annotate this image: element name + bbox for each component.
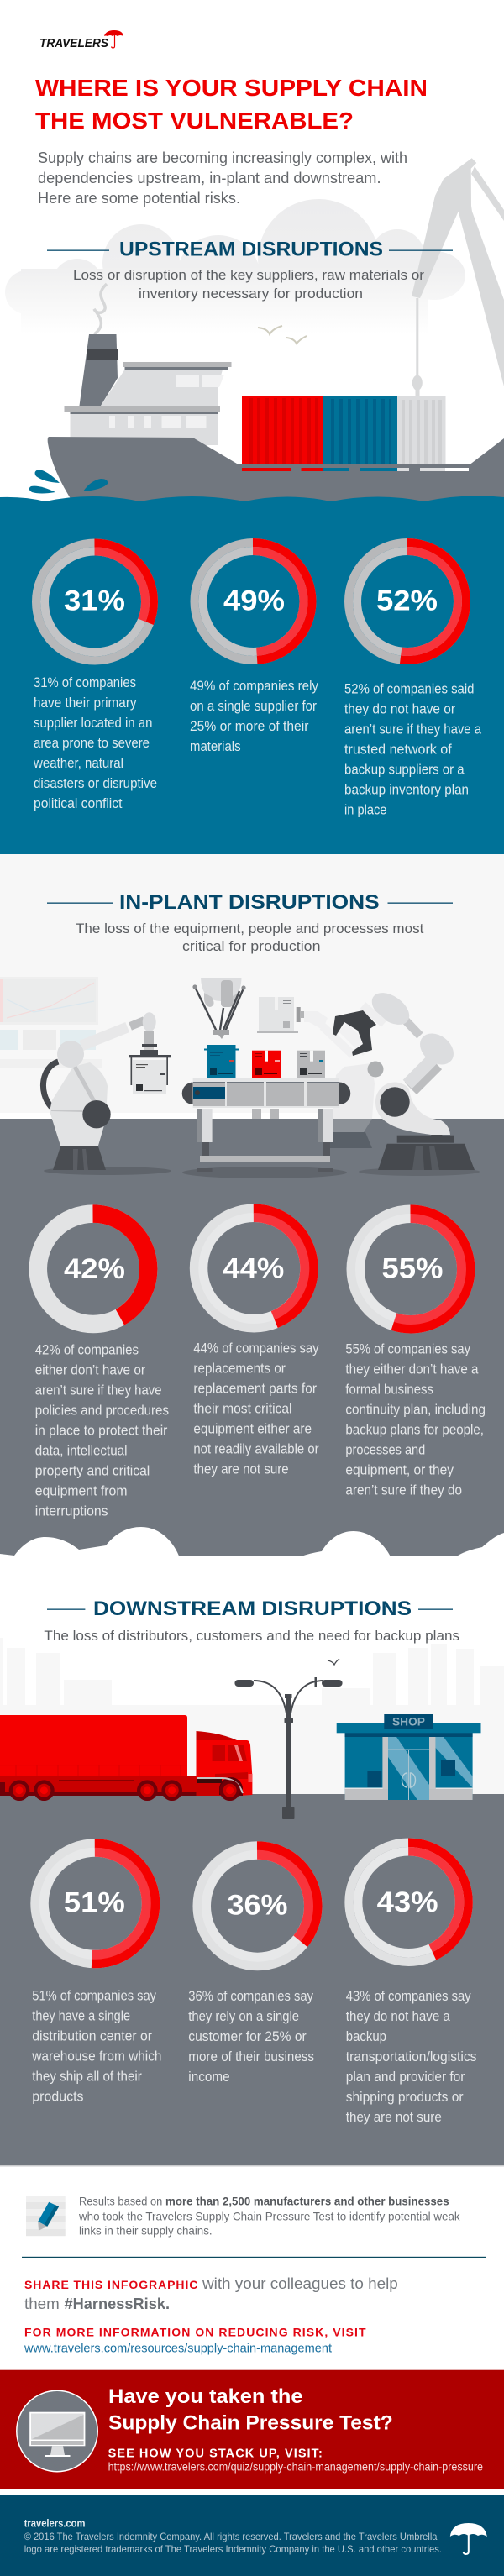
text: 52% stat: backup inventory plan: [344, 783, 469, 798]
text: more information link: www.travelers.com/resources/supply-chain-management: [24, 2342, 333, 2356]
crane silhouette: [412, 158, 504, 396]
delta robot: [192, 978, 246, 1039]
text: 36% stat: customer for 25% or: [188, 2029, 307, 2044]
icon: pencil on notepad: [26, 2196, 66, 2236]
intro text: [38, 150, 407, 207]
text: share call to action: them: [24, 2295, 60, 2312]
donut chart: 55%: [351, 1209, 470, 1329]
donut chart: 49%: 49%: [223, 585, 285, 616]
boxes on conveyor: [204, 1045, 325, 1078]
text: 42% stat: in place to protect their: [35, 1424, 168, 1439]
text: 36% stat: more of their business: [188, 2049, 314, 2064]
water drops: [29, 470, 108, 494]
subheading: upstream: Loss or disruption of the key suppliers, raw materials or: [73, 268, 425, 283]
text: 51% stat: 51% of companies say: [32, 1989, 157, 2004]
text: 42% stat: data, intellectual: [35, 1444, 128, 1459]
text: legal: logo are registered trademarks of The Travelers Indemnity Company in the U.S. and other countries.: [24, 2543, 442, 2555]
text: 55% stat: processes and: [345, 1443, 425, 1458]
text: 31% stat: weather, natural: [33, 756, 123, 771]
text: 44% stat: replacement parts for: [193, 1382, 317, 1397]
donut chart: 42%: [38, 1214, 149, 1324]
text: 52% stat: they do not have or: [344, 702, 455, 717]
text: 43% stat: transportation/logistics: [346, 2049, 477, 2064]
bird: [328, 1659, 339, 1665]
text: more information link: FOR MORE INFORMATION ON REDUCING RISK, VISIT: [24, 2326, 366, 2339]
donut chart: 44%: [194, 1209, 313, 1328]
text: survey note: who took the Travelers Supply Chain Pressure Test to identify potential weak: [78, 2209, 461, 2222]
smoke: [94, 284, 107, 334]
subheading: in-plant: The loss of the equipment, people and processes most: [76, 921, 424, 936]
intro text: Here are some potential risks.: [38, 190, 240, 207]
text: 42% stat: equipment from: [35, 1484, 128, 1499]
text: 43% stat: 43% of companies say: [346, 1989, 471, 2004]
conveyor: [182, 1078, 350, 1178]
faded background robot: [330, 1027, 383, 1148]
subheading: upstream: inventory necessary for production: [139, 286, 363, 302]
subheading: upstream: [73, 268, 425, 302]
text: 43% stat: plan and provider for: [346, 2070, 465, 2085]
text: 52% stat: aren’t sure if they have a: [344, 722, 482, 737]
donut chart: 49%: [195, 543, 312, 660]
text: 44% stat: their most critical: [193, 1402, 292, 1417]
donut chart: 51%: [35, 1844, 155, 1964]
panel: footer: [0, 2495, 504, 2576]
text: 51% stat: distribution center or: [32, 2029, 152, 2044]
text: 51% stat: [31, 1989, 162, 2105]
donut chart: 31%: 31%: [64, 585, 125, 616]
heading: upstream: UPSTREAM DISRUPTIONS: [119, 239, 383, 260]
text: 49% stat: materials: [190, 739, 241, 754]
text: 31% stat: have their primary: [34, 695, 137, 711]
donut chart: 36%: [197, 1846, 318, 1966]
text: banner headline: Supply Chain Pressure Test?: [108, 2412, 393, 2435]
text: 52% stat: backup suppliers or a: [344, 763, 465, 778]
donut chart: 42%: 42%: [64, 1253, 125, 1285]
heading: in-plant: IN-PLANT DISRUPTIONS: [119, 891, 380, 914]
donut chart: 44%: 44%: [223, 1253, 284, 1285]
text: 52% stat: [344, 682, 482, 818]
text: legal: travelers.com: [24, 2516, 85, 2529]
text: 43% stat: backup: [346, 2029, 386, 2044]
donut chart: 36%: 36%: [227, 1889, 287, 1921]
text: 44% stat: not readily available or: [193, 1442, 319, 1457]
text: 52% stat: 52% of companies said: [344, 682, 474, 697]
text: banner headline: Have you taken the: [108, 2385, 302, 2408]
text: survey note: Results based on: [79, 2195, 162, 2208]
text: 42% stat: 42% of companies: [35, 1343, 139, 1358]
floor: [0, 1794, 504, 2165]
panel: in-plant disruptions: [0, 854, 504, 1556]
text: 44% stat: they are not sure: [193, 1462, 289, 1477]
text: share call to action: SHARE THIS INFOGRAPHIC: [24, 2278, 197, 2291]
text: 31% stat: disasters or disruptive: [34, 776, 157, 791]
shop: [337, 1714, 480, 1800]
containers: [242, 396, 445, 464]
text: 31% stat: 31% of companies: [34, 675, 136, 690]
text: survey note: links in their supply chains.: [79, 2224, 213, 2238]
text: survey note: [78, 2195, 461, 2238]
donut chart: 55%: 55%: [381, 1253, 444, 1285]
icon: monitor: [17, 2390, 97, 2472]
text: 43% stat: they are not sure: [346, 2110, 442, 2125]
box in gripper: [257, 997, 353, 1055]
text: 44% stat: replacements or: [193, 1361, 286, 1377]
text: 43% stat: [346, 1989, 477, 2125]
panel: downstream disruptions: [0, 1598, 504, 2167]
donut chart: 51%: 51%: [64, 1887, 125, 1919]
ship: [48, 334, 504, 504]
heading: downstream: DOWNSTREAM DISRUPTIONS: [93, 1598, 412, 1620]
text: 42% stat: aren’t sure if they have: [35, 1383, 162, 1398]
text: banner link: [108, 2447, 483, 2474]
text: 55% stat: formal business: [345, 1382, 433, 1398]
text: 51% stat: products: [32, 2090, 84, 2105]
robot arm: right: [333, 986, 480, 1176]
subheading: in-plant: critical for production: [182, 939, 321, 954]
text: 55% stat: aren’t sure if they do: [345, 1483, 462, 1498]
text: 49% stat: on a single supplier for: [190, 699, 317, 714]
text: share call to action: with your colleagues to help: [202, 2275, 398, 2292]
text: 55% stat: 55% of companies say: [345, 1342, 471, 1357]
text: 36% stat: income: [188, 2070, 230, 2085]
text: 49% stat: 25% or more of their: [190, 719, 309, 734]
text: 44% stat: 44% of companies say: [193, 1341, 319, 1356]
text: 31% stat: political conflict: [34, 796, 123, 811]
panel: pressure test banner: [0, 2370, 504, 2489]
text: banner link: SEE HOW YOU STACK UP, VISIT:: [108, 2447, 323, 2460]
text: 55% stat: they either don’t have a: [345, 1362, 479, 1377]
text: 42% stat: interruptions: [35, 1504, 108, 1519]
shop: SHOP: [392, 1715, 425, 1729]
text: 31% stat: [33, 675, 157, 811]
text: 49% stat: [190, 679, 319, 754]
intro text: Supply chains are becoming increasingly complex, with: [38, 150, 407, 166]
donut chart: 52%: [349, 543, 466, 660]
text: 31% stat: supplier located in an: [34, 716, 152, 731]
truck: [0, 1715, 252, 1801]
water panel: [0, 496, 504, 854]
text: 52% stat: in place: [344, 803, 386, 818]
title: [35, 75, 428, 134]
logo: Travelers: TRAVELERS: [39, 36, 108, 50]
text: 31% stat: area prone to severe: [34, 736, 150, 751]
text: share call to action: [24, 2275, 398, 2312]
text: 36% stat: [188, 1989, 314, 2085]
text: 55% stat: backup plans for people,: [345, 1423, 484, 1438]
text: 49% stat: 49% of companies rely: [190, 679, 319, 694]
text: survey note: more than 2,500 manufacturers and other businesses: [165, 2195, 449, 2208]
skyline: [0, 1638, 504, 1794]
text: 51% stat: they have a single: [32, 2009, 130, 2024]
donut chart: 43%: [349, 1843, 469, 1962]
text: 55% stat: equipment, or they: [345, 1463, 454, 1478]
text: 42% stat: either don’t have or: [35, 1363, 145, 1378]
text: more information link: [24, 2326, 366, 2356]
text: 36% stat: they rely on a single: [188, 2009, 299, 2024]
text: 51% stat: warehouse from which: [31, 2049, 162, 2064]
title: WHERE IS YOUR SUPPLY CHAIN: [35, 75, 428, 101]
text: 43% stat: they do not have a: [346, 2009, 451, 2024]
text: 42% stat: policies and procedures: [35, 1403, 169, 1419]
subheading: in-plant: [76, 921, 424, 954]
text: 51% stat: they ship all of their: [32, 2070, 142, 2085]
title: THE MOST VULNERABLE?: [35, 108, 354, 134]
subheading: downstream: The loss of distributors, customers and the need for backup plans: [44, 1629, 459, 1644]
cloud divider: [0, 1527, 504, 1797]
text: 44% stat: equipment either are: [193, 1422, 312, 1437]
logo: Travelers: [39, 30, 123, 50]
wheels: [9, 1780, 240, 1801]
birds: [258, 326, 307, 344]
text: 44% stat: [193, 1341, 319, 1477]
text: 43% stat: shipping products or: [346, 2090, 464, 2105]
donut chart: 52%: 52%: [376, 585, 438, 616]
background control screen: [0, 977, 102, 1068]
text: 42% stat: [35, 1343, 169, 1519]
clouds background: [5, 199, 465, 336]
text: legal: [24, 2516, 442, 2555]
donut chart: 31%: [36, 543, 154, 660]
intro text: dependencies upstream, in-plant and downstream.: [38, 170, 381, 186]
donut chart: 43%: 43%: [377, 1886, 438, 1918]
hull: [48, 437, 504, 504]
text: 36% stat: 36% of companies say: [188, 1989, 314, 2004]
text: legal: © 2016 The Travelers Indemnity Company. All rights reserved. Travelers and the Travelers Umbrella: [24, 2531, 438, 2542]
text: share call to action: #HarnessRisk.: [64, 2295, 170, 2312]
text: 42% stat: property and critical: [35, 1464, 150, 1479]
robot arm: left: [43, 1012, 171, 1175]
text: 55% stat: continuity plan, including: [345, 1403, 486, 1418]
street lamp: [234, 1677, 343, 1819]
icon: umbrella: [450, 2523, 487, 2554]
text: 55% stat: [345, 1342, 486, 1498]
text: banner headline: [108, 2385, 393, 2435]
text: 52% stat: trusted network of: [344, 742, 452, 758]
